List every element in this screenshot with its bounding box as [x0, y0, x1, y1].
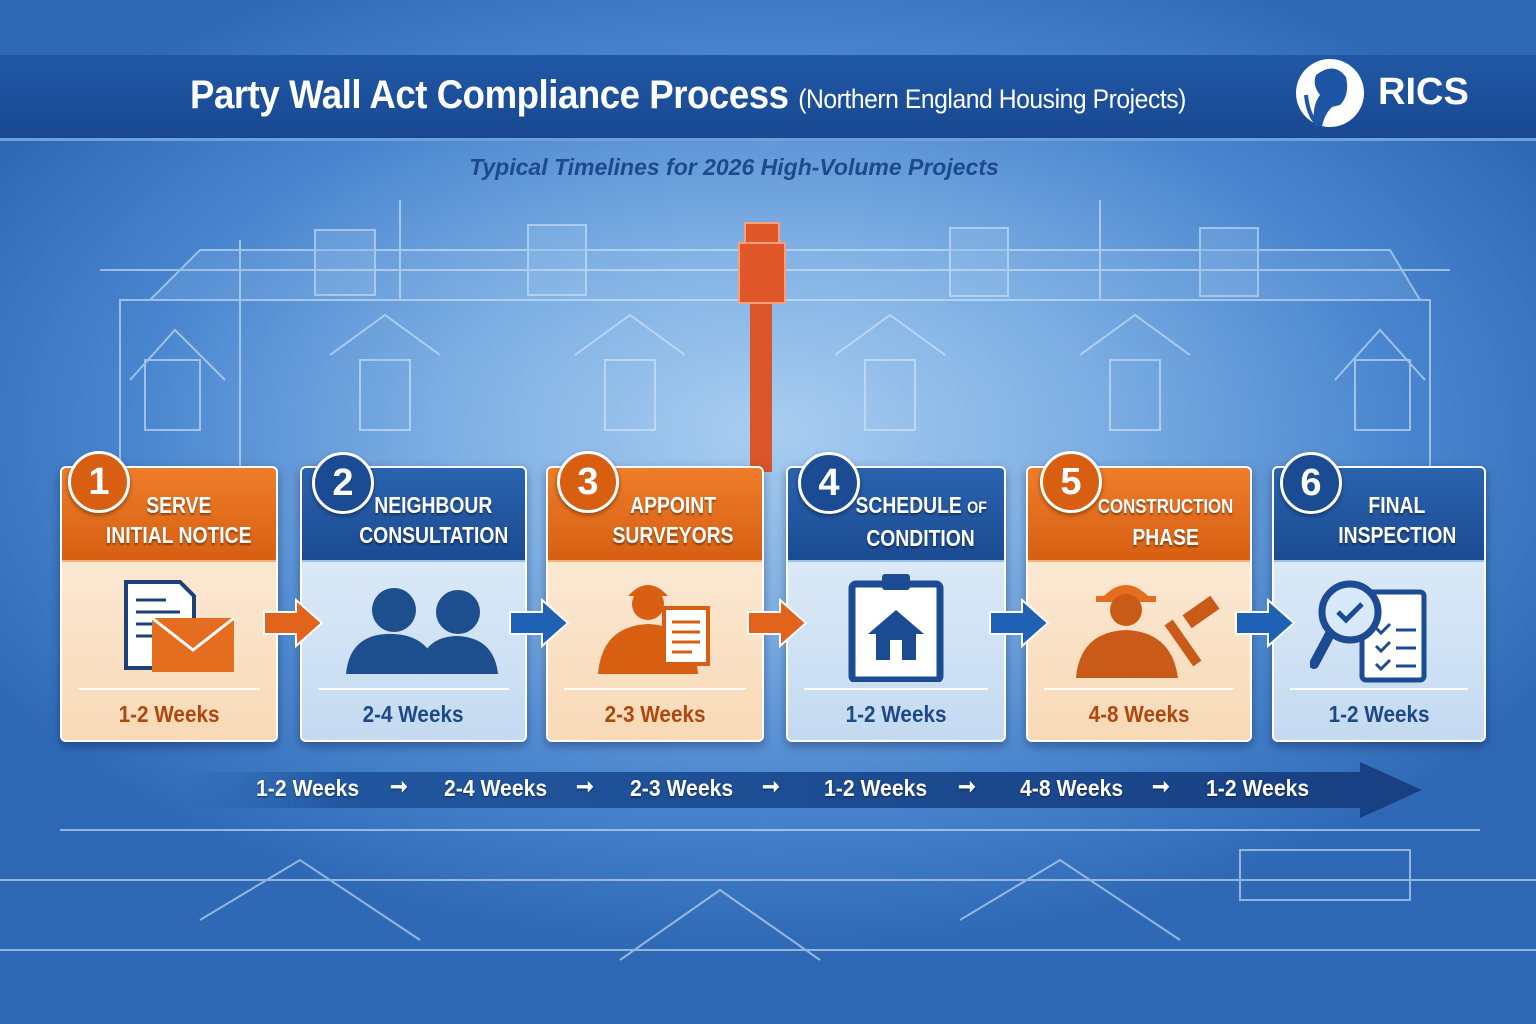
- timeline arrow bar: 1-2 Weeks: [824, 775, 927, 801]
- logo: RICS: RICS: [1378, 71, 1469, 113]
- timeline arrow bar: ➞: [1152, 773, 1170, 799]
- card 4: 1-2 Weeks: [846, 701, 946, 727]
- timeline arrow bar: 2-4 Weeks: [444, 775, 547, 801]
- text: 6: [1300, 462, 1322, 504]
- title: Party Wall Act Compliance Process (Northern England Housing Projects): [190, 73, 1186, 117]
- logo: RICS: [1296, 59, 1469, 127]
- timeline arrow bar: 1-2 Weeks: [256, 775, 359, 801]
- card 1: INITIAL NOTICE: [106, 522, 252, 548]
- card 3: 2-3 Weeks: [605, 701, 705, 727]
- timeline arrow bar: ➞: [390, 773, 408, 799]
- step number badges: [68, 451, 130, 513]
- card 2: 2-4 Weeks: [363, 701, 464, 727]
- card 4: SCHEDULE OF: [855, 492, 987, 518]
- card 4: CONDITION: [867, 525, 975, 551]
- card 3: APPOINT: [630, 492, 716, 518]
- timeline arrow bar: ➞: [576, 773, 594, 799]
- icon: surveyor with clipboard: [598, 585, 710, 674]
- icon: document & envelope: [124, 580, 235, 672]
- timeline arrow bar: [233, 762, 1422, 818]
- icon: two people: [346, 588, 498, 674]
- text: 2: [332, 462, 354, 504]
- step number badges: 1: [88, 461, 110, 503]
- card 1: [60, 466, 278, 742]
- card 3: [546, 466, 764, 742]
- timeline arrow bar: 2-3 Weeks: [630, 775, 733, 801]
- icon: red chimney: [738, 222, 786, 472]
- card 5: [1026, 466, 1252, 742]
- card 6: [1272, 466, 1486, 742]
- card 5: 4-8 Weeks: [1089, 701, 1189, 727]
- card 5: CONSTRUCTION: [1098, 496, 1234, 518]
- text: 4: [818, 462, 840, 504]
- card 2: [300, 466, 527, 742]
- icon: magnifier and checklist: [1310, 580, 1426, 682]
- timeline arrow bar: ➞: [762, 773, 780, 799]
- card 6: FINAL: [1369, 492, 1425, 518]
- icon: construction worker with hammer: [1076, 585, 1220, 678]
- card 2: CONSULTATION: [359, 522, 508, 548]
- card 6: INSPECTION: [1338, 522, 1456, 548]
- title bar: [0, 55, 1536, 141]
- timeline arrow bar: 4-8 Weeks: [1020, 775, 1123, 801]
- card 6: 1-2 Weeks: [1329, 701, 1429, 727]
- text: 5: [1060, 461, 1082, 503]
- icon: clipboard house: [848, 574, 944, 682]
- subtitle: Typical Timelines for 2026 High-Volume Projects: [469, 154, 999, 180]
- card 4: [786, 466, 1006, 742]
- card 5: PHASE: [1133, 524, 1199, 550]
- card 3: SURVEYORS: [613, 522, 733, 548]
- card 1: SERVE: [146, 492, 212, 518]
- card 2: NEIGHBOUR: [374, 492, 493, 518]
- arrows between cards: [263, 598, 324, 648]
- card 1: 1-2 Weeks: [119, 701, 219, 727]
- text: 3: [577, 461, 599, 503]
- timeline arrow bar: ➞: [958, 773, 976, 799]
- timeline arrow bar: 1-2 Weeks: [1206, 775, 1309, 801]
